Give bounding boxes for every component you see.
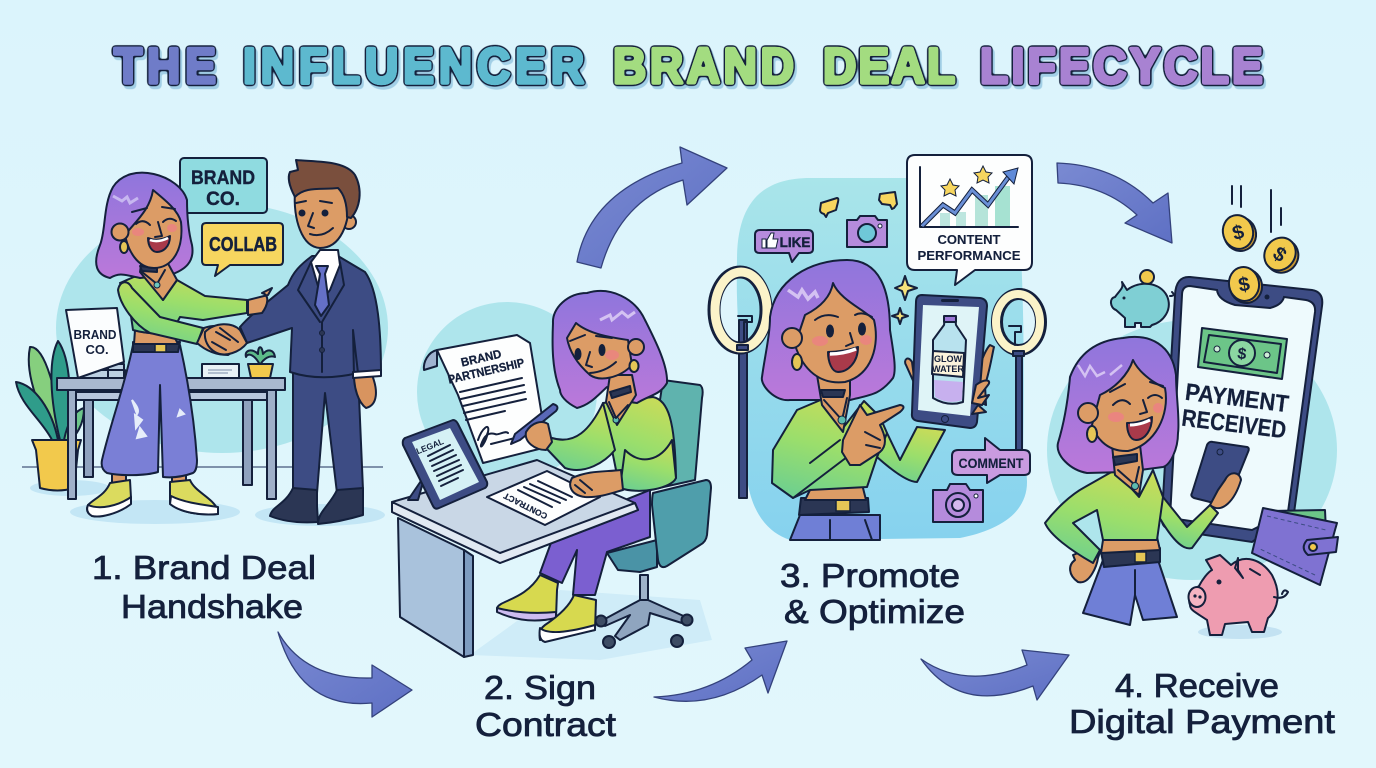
bubble: brand co: CO. bbox=[206, 189, 240, 210]
label: step 1 bbox=[92, 549, 316, 625]
sparkles bbox=[892, 276, 917, 324]
payment received text: PAYMENT bbox=[1184, 379, 1291, 418]
tablet: legal: LEGAL bbox=[415, 436, 445, 456]
title: LIFECYCLE bbox=[980, 39, 1266, 94]
right ring light bbox=[996, 294, 1041, 451]
icon: like badge bbox=[755, 230, 813, 262]
title: THE bbox=[114, 39, 221, 94]
cash on screen bbox=[1198, 328, 1287, 379]
label: step 2 bbox=[475, 669, 616, 743]
payment received text: RECEIVED bbox=[1180, 405, 1288, 444]
big phone bbox=[1162, 277, 1322, 542]
icon: camera bottom bbox=[933, 484, 983, 522]
teal piggy bank bbox=[1111, 270, 1174, 327]
document: brand partnership: PARTNERSHIP bbox=[447, 356, 526, 387]
desk shadow bbox=[470, 590, 712, 660]
icon: camera top bbox=[847, 216, 887, 247]
chair bbox=[596, 380, 711, 648]
bubble: content performance bbox=[907, 155, 1032, 285]
plant bbox=[16, 341, 84, 490]
paper: contract bbox=[487, 471, 600, 525]
legs and shoes bbox=[497, 490, 650, 642]
label: step 4: Digital Payment bbox=[1069, 703, 1335, 740]
label: step 4 bbox=[1069, 667, 1335, 740]
document: brand partnership: BRAND bbox=[460, 347, 503, 370]
bubble: comment: COMMENT bbox=[958, 456, 1024, 471]
phone: glow water: WATER bbox=[932, 364, 964, 374]
bubble: brand co bbox=[180, 158, 267, 213]
wallet bbox=[1252, 508, 1338, 585]
title: DEAL bbox=[823, 39, 957, 94]
paper: contract: CONTRACT bbox=[501, 490, 549, 521]
falling coins: $ bbox=[1269, 243, 1290, 267]
bubble: brand co: BRAND bbox=[191, 168, 255, 189]
mini chart bbox=[920, 166, 1018, 227]
label: step 3 bbox=[780, 557, 965, 630]
woman 3 head bbox=[762, 260, 895, 432]
panel: step 4 receive digital payment bbox=[1045, 186, 1338, 639]
woman 3 body bbox=[772, 396, 945, 540]
handshake bbox=[205, 324, 247, 354]
document: brand partnership bbox=[424, 335, 547, 463]
label: step 3: 3. Promote bbox=[780, 557, 960, 594]
bubble: content performance: CONTENT bbox=[938, 232, 1001, 247]
floor line and shadows bbox=[22, 467, 385, 526]
desk bbox=[57, 364, 285, 499]
arrow big upper bbox=[577, 147, 727, 268]
desk sign: BRAND bbox=[74, 327, 116, 342]
backdrop blob 2 bbox=[417, 302, 597, 482]
bubble: content performance: PERFORMANCE bbox=[918, 248, 1021, 263]
payment received text bbox=[1180, 379, 1291, 444]
label: step 4: 4. Receive bbox=[1115, 667, 1279, 704]
cash on screen: $ bbox=[1236, 346, 1247, 363]
label: step 1: Handshake bbox=[121, 588, 303, 625]
bubble: comment bbox=[952, 438, 1030, 483]
label: step 2: 2. Sign bbox=[484, 669, 596, 706]
arrow upper right bbox=[1057, 163, 1172, 243]
falling coins: $ bbox=[1237, 273, 1252, 297]
label: step 1: 1. Brand Deal bbox=[92, 549, 316, 586]
bubble: collab bbox=[202, 223, 283, 276]
hand and pen bbox=[511, 404, 557, 450]
arrow 1 to 2 bbox=[278, 632, 412, 717]
desk sign: CO. bbox=[85, 342, 109, 357]
desk sign bbox=[66, 308, 124, 378]
phone: glow water bbox=[905, 295, 994, 428]
speech icons bbox=[820, 192, 897, 217]
panel: step 3 promote and optimize bbox=[714, 155, 1041, 540]
desk plant bbox=[246, 347, 275, 378]
icon: like badge: LIKE bbox=[780, 235, 810, 250]
woman 2 bbox=[546, 291, 676, 497]
tablet: legal bbox=[403, 420, 487, 509]
falling coins bbox=[1219, 186, 1305, 306]
woman 1 bbox=[87, 173, 272, 516]
pink piggy bank bbox=[1188, 555, 1288, 639]
title: BRAND bbox=[613, 39, 797, 94]
bubble: collab: COLLAB bbox=[209, 234, 277, 256]
man in suit bbox=[240, 160, 381, 524]
backdrop blob 4 bbox=[1047, 320, 1337, 580]
pointing hand bbox=[842, 405, 904, 465]
arrow 3 to 4 bbox=[921, 650, 1069, 700]
panel: step 2 sign contract bbox=[392, 291, 712, 660]
panel: step 1 brand deal handshake bbox=[16, 158, 388, 526]
backdrop blob 1 bbox=[56, 203, 388, 453]
label: step 2: Contract bbox=[475, 706, 616, 743]
title: INFLUENCER bbox=[243, 39, 589, 94]
woman 4 bbox=[1045, 337, 1249, 625]
backdrop blob 3 bbox=[737, 178, 1027, 540]
desk bbox=[392, 460, 638, 657]
arrow 2 to 3 bbox=[654, 641, 787, 701]
title bbox=[114, 39, 1266, 94]
falling coins: $ bbox=[1230, 221, 1246, 245]
phone: glow water: GLOW bbox=[934, 354, 962, 364]
left ring light bbox=[714, 272, 767, 498]
label: step 3: & Optimize bbox=[784, 593, 965, 630]
